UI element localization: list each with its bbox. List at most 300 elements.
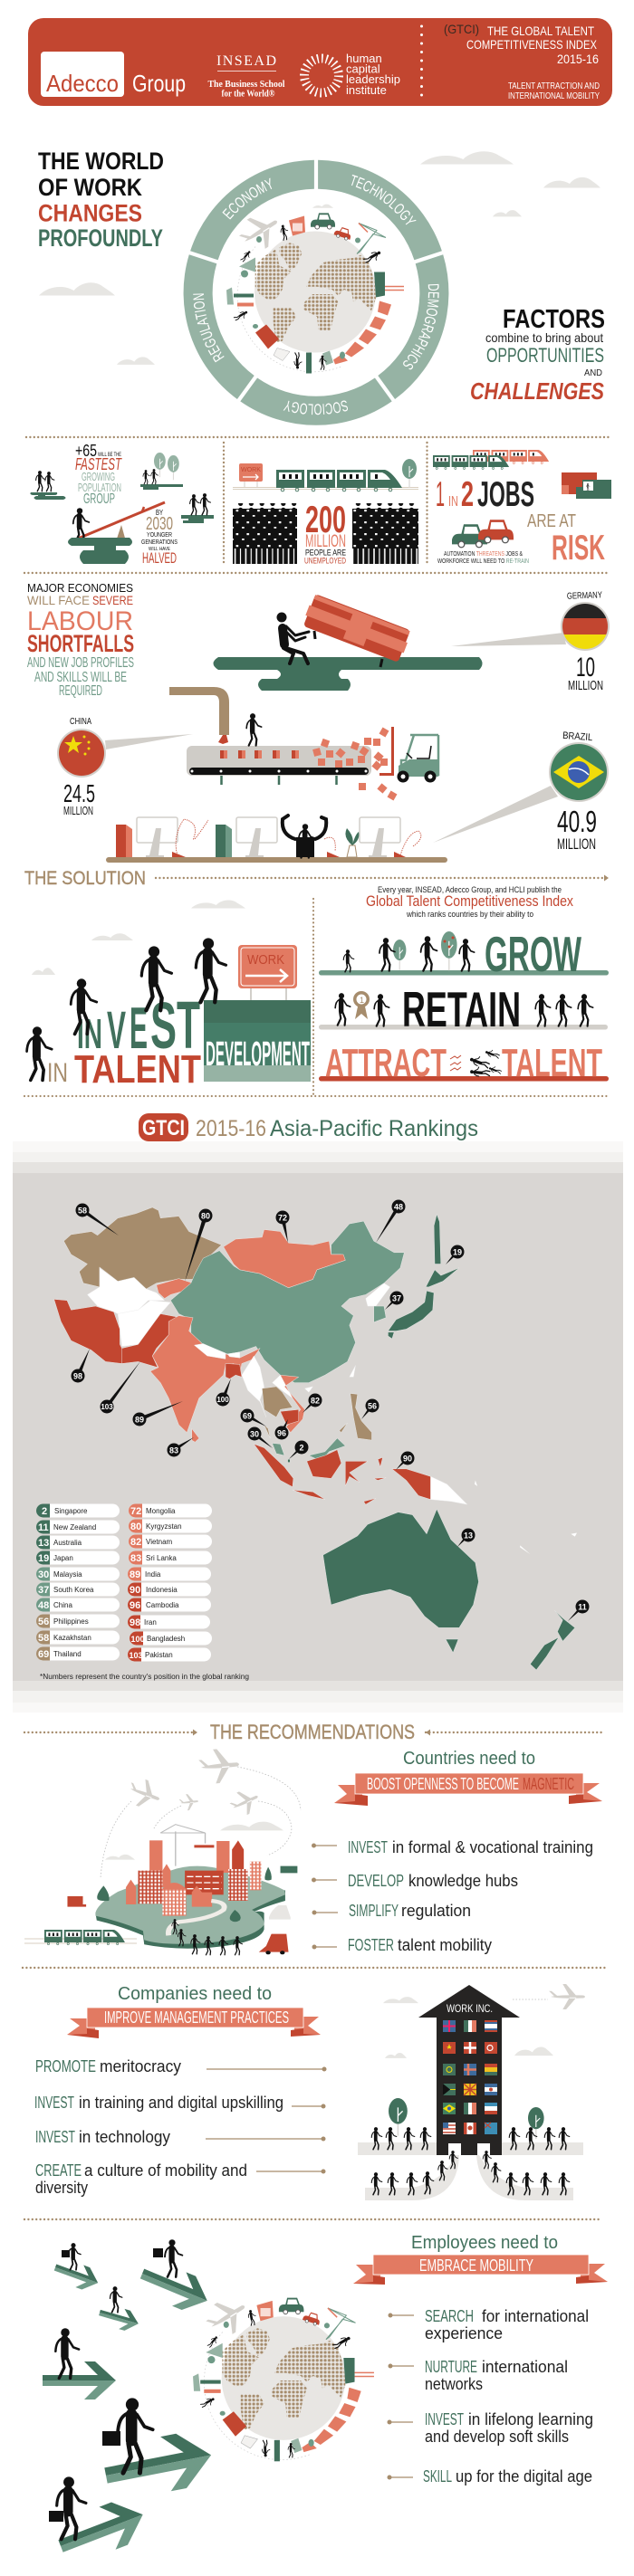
people walking [172,1919,243,1955]
briefcases [49,2248,163,2522]
text: 1 in 2 jobs are at risk: 2 [461,475,474,514]
callout: Germany 10 million: MILLION [568,678,603,693]
map pins with global ranks [71,1200,589,1621]
item: create a culture of mobility and diversity: CREATE [35,2161,82,2180]
row: Australia [36,1535,120,1550]
item: search for international experience: experience [425,2324,503,2342]
item: nurture international networks [388,2358,568,2393]
ribbon: boost openness to become magnetic [334,1773,602,1806]
row: Mongolia: 72 [130,1506,141,1517]
icon: trains [433,450,549,469]
row: Kazakhstan [36,1631,120,1644]
item: invest in training: INVEST [34,2094,74,2112]
row: Iran [128,1615,210,1629]
illustration: Work Inc. building with people [358,1984,585,2200]
train [24,1930,137,1945]
row: South Korea: South Korea [53,1586,94,1594]
heading: the solution [24,868,609,889]
text: invest [77,987,200,1063]
heading: companies need to: Companies need to [118,1984,272,2004]
row: Australia: Australia [53,1539,82,1547]
ribbon: improve management practices [67,2008,321,2038]
row: retain [319,981,608,1037]
building [418,1985,520,2155]
panel: employees need to embrace mobility [353,2233,608,2485]
row: Philippines [36,1615,120,1627]
text: 200 million people are unemployed [304,498,346,565]
icon: dotted world globe with surrounding scene [193,2291,374,2461]
legend: country rankings right column [128,1504,212,1662]
icon: trucks [562,472,611,499]
pin: India 89 [132,1401,183,1426]
arrows [43,2256,216,2568]
report title: (GTCI) [444,22,479,36]
row: Kyrgyzstan: 80 [130,1522,141,1532]
text: factors combine to bring about opportunities and challenges: AND [584,368,602,378]
row: Australia: 13 [38,1538,49,1549]
heading: GTCI 2015-16 Asia-Pacific Rankings: Asia-Pacific Rankings [270,1116,478,1141]
pin: Kazakhstan 58 [76,1204,119,1236]
item: nurture international networks: NURTURE [425,2358,477,2376]
text: 1 in 2 jobs are at risk: 1 [436,475,445,514]
text: major economies will face severe labour shortfalls: LABOUR [27,606,133,636]
row: Japan: Japan [53,1554,73,1562]
illustration: person pushing sofa on green platform [214,593,482,691]
text: invest: T [177,987,200,1063]
icon: work sign: WORK [241,467,261,473]
chart: five factors wheel [183,159,449,425]
logo: human capital leadership institute: leadership [346,72,400,86]
row: Singapore [36,1504,120,1517]
row: Cambodia: 96 [130,1600,140,1611]
text: factors combine to bring about opportunities and challenges: FACTORS [503,305,605,334]
clouds [32,900,245,975]
text: DEVELOPMENT [206,1035,310,1073]
item: invest in lifelong learning: INVEST [425,2410,464,2428]
text: +65 will be the fastest growing population group [75,442,122,507]
row: Bangladesh: Bangladesh [147,1635,185,1643]
text: every year description: Every year, INSEAD, Adecco Group, and HCLI publish the [378,885,562,895]
buildings [126,1840,261,1916]
row: Indonesia: Indonesia [146,1586,178,1594]
report title: TALENT ATTRACTION AND [508,81,600,91]
row: Japan: 19 [38,1553,49,1564]
row: India: India [145,1570,161,1579]
icon: work sign: WORK [247,952,284,968]
chart: development block [204,1000,311,1082]
item: invest in formal and vocational training [312,1838,593,1856]
pin: South Korea 37: 37 [392,1294,401,1303]
text: invest: V [107,1001,126,1060]
row: Kazakhstan: 58 [38,1633,49,1644]
icon: couple with trees [140,453,183,490]
item: invest in lifelong learning [388,2410,593,2446]
text: major economies will face severe labour shortfalls: WILL FACE [27,593,90,607]
icon: work sign [238,945,297,1000]
row: Bangladesh [130,1631,212,1646]
item: invest in technology [35,2128,326,2146]
item: promote meritocracy: meritocracy [100,2057,181,2075]
item: foster talent mobility: talent mobility [398,1936,492,1954]
text: 1 in 2 jobs are at risk: JOBS [477,475,534,514]
item: promote meritocracy [35,2057,326,2075]
icon: person on seesaw [68,502,165,564]
people queue [371,2127,570,2195]
item: develop knowledge hubs: DEVELOP [348,1872,404,1890]
row: retain: RETAIN [402,981,521,1037]
heading: GTCI 2015-16 Asia-Pacific Rankings: 2015-16 [196,1116,266,1141]
title: the world of work changes profoundly: OF WORK [38,174,142,201]
heading: the recommendations: THE RECOMMENDATIONS [210,1721,415,1743]
text: major economies will face severe labour shortfalls: AND NEW JOB PROFILES [27,655,134,671]
row: Sri Lanka [129,1551,212,1564]
text: major economies will face severe labour shortfalls: REQUIRED [59,683,102,699]
callout: Germany 10 million: GERMANY [567,590,602,602]
row: Vietnam [129,1535,212,1548]
ribbon: boost openness to become magnetic: MAGNETIC [523,1775,574,1793]
pin: Thailand 69 [241,1408,266,1426]
heading: GTCI 2015-16 Asia-Pacific Rankings [139,1113,478,1141]
text: 1 in 2 jobs are at risk: ARE AT [527,511,576,531]
row: China [36,1598,120,1611]
pin: Philippines 56 [361,1399,379,1419]
figure pushing [277,612,309,663]
title: the world of work changes profoundly: CHANGES [38,199,142,226]
pin: Bangladesh 100: 100 [216,1396,229,1404]
row: Malaysia [36,1568,120,1580]
row: Cambodia [128,1598,211,1611]
pin: Australia 13 [457,1528,475,1547]
row: New Zealand: New Zealand [53,1523,96,1531]
item: foster talent mobility: FOSTER [348,1936,394,1954]
text: factors combine to bring about opportunities and challenges: CHALLENGES [470,377,605,405]
text: automation threatens jobs [437,551,529,565]
text: 200 million people are unemployed: UNEMPLOYED [304,556,346,565]
callout: Germany 10 million [451,590,610,693]
row: Pakistan: Pakistan [145,1651,173,1659]
row: Kyrgyzstan: Kyrgyzstan [146,1522,182,1531]
pin: Indonesia 90: 90 [403,1454,412,1463]
illustration: employees striding on arrows towards globe [43,2239,216,2568]
pin: Kyrgyzstan 80 [185,1209,212,1282]
panel: +65 fastest growing population [30,442,214,567]
illustration: magnetic city island [24,1747,301,1955]
pin: Indonesia 90 [396,1452,415,1470]
segment label: regulation: REGULATION [193,293,225,362]
pin: China 48: 48 [394,1202,403,1211]
row: Sri Lanka: Sri Lanka [146,1554,177,1562]
row: Thailand: 69 [38,1649,49,1660]
segment label: technology: TECHNOLOGY [351,174,417,224]
title: the world of work changes profoundly: PROFOUNDLY [38,224,163,252]
text: major economies will face severe labour shortfalls: SEVERE [92,593,133,607]
row: China: China [53,1601,72,1609]
icon: work sign [239,463,263,487]
text: invest: S [150,990,177,1063]
clouds around the wheel [39,151,600,365]
report title: 2015-16 [557,52,599,66]
chart: crowd of unemployed left [233,503,297,564]
item: create a culture of mobility and diversity: diversity [35,2179,88,2197]
pin: Bangladesh 100 [216,1379,231,1407]
panel: companies need to improve management [34,1984,326,2197]
item: search for international experience [388,2307,589,2342]
logo: INSEAD [208,53,285,100]
item: simplify regulation [312,1902,471,1920]
text: in talent: IN [47,1058,68,1088]
callout: Brazil 40.9 million [433,730,609,853]
island [95,1866,285,1949]
pin: South Korea 37 [385,1291,404,1310]
report title: INTERNATIONAL MOBILITY [508,91,600,101]
footnote: *Numbers represent the country's position in the global ranking [40,1673,249,1681]
text: automation threatens jobs: AUTOMATION THREATENS JOBS & [444,551,523,558]
pin: Mongolia 72 [275,1211,290,1243]
row: Malaysia: 30 [38,1569,49,1580]
icon: green train [233,459,418,491]
text: 200 million people are unemployed: PEOPLE ARE [305,549,346,558]
report title: COMPETITIVENESS INDEX [466,37,598,52]
illustration: conveyor belt factory with forklift [169,687,438,800]
text: invest: IN [77,1010,102,1057]
legend: country rankings left column [36,1504,120,1660]
row: Iran: Iran [144,1618,157,1627]
text: +65 will be the fastest growing population group: POPULATION [78,481,121,494]
ribbon: embrace mobility: EMBRACE MOBILITY [419,2256,533,2275]
text: by 2030 younger generations will have halved: YOUNGER [147,532,172,539]
row: Malaysia: Malaysia [53,1570,82,1579]
cloud [220,1822,283,1830]
item: develop knowledge hubs: knowledge hubs [408,1872,518,1890]
heading: GTCI 2015-16 Asia-Pacific Rankings: GTCI [142,1116,185,1140]
pin: Philippines 56: 56 [368,1401,377,1410]
item: develop knowledge hubs [312,1872,518,1890]
pin: New Zealand 11: 11 [578,1602,587,1611]
logo: INSEAD: INSEAD [216,53,276,69]
icon: couple on bench [181,493,214,523]
text: 200 million people are unemployed: 200 [305,498,346,540]
pin: Mongolia 72: 72 [278,1213,287,1222]
logo: INSEAD: The Business School [208,80,285,90]
row: Sri Lanka: 83 [130,1553,141,1564]
text: invest: E [130,995,148,1061]
item: invest in technology: INVEST [35,2128,75,2146]
text: factors combine to bring about opportunities and challenges [470,305,605,405]
panel: 200 million unemployed [233,459,418,565]
row: Japan [36,1551,120,1564]
callout: Brazil 40.9 million: 40.9 [557,805,597,838]
item: skill up for the digital age [388,2467,592,2485]
row: Cambodia: Cambodia [146,1601,179,1609]
callout: China 24.5 million: CHINA [70,717,91,727]
pin: Iran 98: 98 [73,1372,82,1381]
row: New Zealand: 11 [38,1522,49,1533]
text: major economies will face severe labour shortfalls: MAJOR ECONOMIES [27,581,133,595]
callout: China 24.5 million: MILLION [63,804,93,817]
pin: Thailand 69: 69 [243,1412,252,1421]
logo: human capital leadership institute: institute [346,83,387,97]
panel: invest in talent development [27,900,311,1092]
text: major economies will face severe labour shortfalls [27,581,134,699]
pin: Vietnam 82 [303,1394,322,1413]
item: nurture international networks: networks [425,2375,483,2393]
row: Pakistan: 103 [129,1651,143,1660]
item: create a culture of mobility and diversity: a culture of mobility and [84,2161,247,2180]
flags [443,2020,497,2134]
text: by 2030 younger generations will have halved: GENERATIONS [141,539,178,546]
row: Thailand [36,1647,120,1660]
text: in talent: TALENT [74,1047,201,1092]
row: attract talent [319,1041,609,1085]
text: +65 will be the fastest growing population group: FASTEST [75,455,122,473]
callout: China 24.5 million [57,717,193,817]
row: Vietnam: 82 [130,1537,141,1548]
map: countries [54,1207,577,1670]
text: +65 will be the fastest growing population group: GROWING [82,470,115,483]
row: India: 89 [130,1569,140,1580]
row: Thailand: Thailand [53,1650,82,1658]
pin: India 89: 89 [135,1416,144,1425]
text: by 2030 younger generations will have halved: 2030 [146,514,173,534]
text: major economies will face severe labour shortfalls: SHORTFALLS [27,630,134,657]
pin: Sri Lanka 83 [167,1437,194,1457]
pin: Singapore 2: 2 [299,1443,304,1452]
row: China: 48 [38,1600,49,1611]
text: major economies will face severe labour shortfalls: AND SKILLS WILL BE [34,670,127,685]
row: Mongolia: Mongolia [146,1507,176,1515]
text: +65 will be the fastest growing population group: +65 [75,442,97,460]
row: Philippines: Philippines [53,1617,89,1626]
chart: crowd of unemployed right [352,503,418,564]
callout: China 24.5 million: 24.5 [63,779,95,807]
row: retain: 1 [360,996,364,1005]
segment label: economy: ECONOMY [223,177,272,219]
icon: elderly couple on bench [30,471,65,500]
text: every year description [366,885,573,920]
icon: cars [452,520,514,548]
row: Mongolia [129,1504,212,1517]
pin: Vietnam 82: 82 [311,1396,320,1405]
pin: Kyrgyzstan 80: 80 [201,1211,210,1220]
row: Iran: 98 [130,1617,140,1628]
report title [444,22,600,101]
clouds and plane [383,1984,585,2058]
text: by 2030 younger generations will have halved: HALVED [142,549,177,567]
text: every year description: which ranks countries by their ability to [406,910,533,920]
ribbon: embrace mobility [353,2255,608,2285]
illustration: overworked office desk with phones [106,816,447,863]
report title: THE GLOBAL TALENT [487,24,594,38]
text: 200 million people are unemployed: MILLION [305,532,346,551]
text: 1 in 2 jobs are at risk [436,475,605,568]
row: Vietnam: Vietnam [146,1538,173,1546]
row: South Korea: 37 [38,1585,49,1596]
pin: Iran 98 [71,1349,90,1383]
pin: Malaysia 30 [248,1426,273,1448]
text: 1 in 2 jobs are at risk: RISK [552,529,605,568]
logo: Adecco Group: Adecco [46,70,119,97]
ribbon: improve management practices: IMPROVE MANAGEMENT PRACTICES [104,2008,289,2027]
text: by 2030 younger generations will have halved: BY [156,509,163,517]
doors [448,2143,490,2155]
item: skill up for the digital age: SKILL [423,2467,452,2485]
text: 1 in 2 jobs are at risk: IN [448,494,458,510]
item: invest in lifelong learning: in lifelong learning [468,2410,593,2428]
panel: global talent competitiveness index [319,885,609,1085]
text: automation threatens jobs: WORKFORCE WILL NEED TO RE-TRAIN [437,558,529,565]
text: +65 will be the fastest growing population group: GROUP [83,491,115,507]
pin: New Zealand 11 [568,1600,589,1621]
title: the world of work changes profoundly: THE WORLD [38,148,164,175]
item: search for international experience: SEARCH [425,2307,474,2325]
row: Kazakhstan: Kazakhstan [53,1634,91,1642]
trees [389,2098,408,2136]
item: foster talent mobility [312,1936,492,1954]
crane [160,1825,206,1866]
item: simplify regulation: SIMPLIFY [349,1902,399,1920]
pin: Australia 13: 13 [464,1531,473,1541]
row: Kyrgyzstan [129,1519,212,1533]
vehicles around island [67,1896,86,1907]
text: every year description: Global Talent Competitiveness Index [366,892,573,910]
item: invest in lifelong learning: and develop soft skills [425,2428,569,2446]
icon: dotted world globe with surrounding scene [226,206,404,373]
callout: Brazil 40.9 million: BRAZIL [562,730,593,743]
item: promote meritocracy: PROMOTE [35,2057,96,2075]
row: Singapore: 2 [42,1506,47,1517]
heading: the recommendations [24,1721,605,1743]
logo: Adecco Group [41,52,186,97]
heading: employees need to: Employees need to [411,2233,558,2253]
pin: Pakistan 103 [100,1361,140,1414]
people [55,2239,182,2539]
item: invest in formal and vocational training: in formal & vocational training [392,1838,593,1856]
row: Philippines: 56 [38,1617,49,1627]
title: the world of work changes profoundly [38,148,164,252]
segment label: demographics: DEMOGRAPHICS [403,284,439,369]
callout: Brazil 40.9 million: MILLION [557,835,596,853]
heading: the solution: THE SOLUTION [24,868,146,889]
pin: Japan 19 [446,1245,464,1264]
item: invest in technology: in technology [79,2128,170,2146]
row: Singapore: Singapore [54,1507,88,1515]
panel: 1 in 2 jobs at risk [433,450,611,568]
pin: Pakistan 103: 103 [101,1403,113,1411]
logo: INSEAD: for the World® [221,89,275,100]
row: Indonesia: 90 [130,1585,140,1596]
logo: human capital leadership institute: human [346,52,382,65]
item: invest in formal and vocational training: INVEST [348,1838,388,1856]
row: grow [319,926,609,982]
figures climbing [27,938,226,1080]
logo: human capital leadership institute [304,52,400,97]
row: New Zealand [36,1521,120,1533]
road [168,1901,225,1935]
item: nurture international networks: international [482,2358,568,2376]
trees [97,1885,110,1901]
row: India [128,1568,211,1580]
row: Indonesia [128,1582,211,1597]
text: in talent [47,1047,201,1092]
pin: Sri Lanka 83: 83 [169,1446,178,1455]
text: +65 will be the fastest growing population group: WILL BE THE [98,453,121,458]
header banner [28,18,612,106]
row: Bangladesh: 100 [130,1635,145,1644]
pin: Kazakhstan 58: 58 [78,1206,87,1215]
pin: Japan 19: 19 [453,1247,462,1256]
pin: Cambodia 96 [275,1419,288,1439]
pin: China 48 [376,1200,406,1243]
